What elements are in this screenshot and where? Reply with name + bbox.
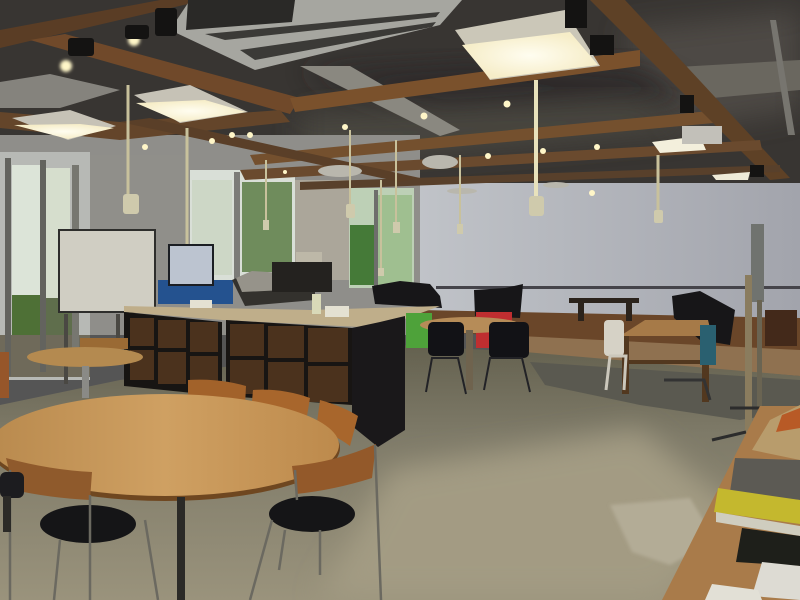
ceiling [0, 0, 800, 200]
chair at left edge [0, 352, 24, 532]
ceiling beams [0, 0, 790, 190]
printer [232, 252, 332, 306]
projector [682, 126, 722, 144]
concrete floor [0, 345, 800, 600]
left wall and side wall [0, 135, 420, 335]
middle dining table with chairs [406, 312, 530, 394]
left glass doors [0, 152, 90, 380]
central shelves with counter [124, 294, 440, 447]
pendant dome lights [318, 155, 569, 194]
light panel: right small [652, 136, 706, 153]
spotlight housings [68, 0, 764, 177]
whiteboard [59, 230, 155, 384]
partition board right [712, 224, 764, 440]
foreground chair left [6, 458, 158, 600]
ceiling lights [12, 0, 764, 196]
centre window [190, 170, 295, 280]
black chairs [428, 322, 529, 358]
hanging power cords [123, 80, 663, 276]
foreground chair right [250, 444, 381, 600]
wooden platform [420, 310, 800, 376]
light panel: far [712, 172, 750, 180]
light panel: far left [12, 110, 116, 140]
light panel: centre left [134, 85, 248, 123]
spotlights [60, 34, 600, 196]
foreground back chairs [188, 380, 358, 446]
computer and blue cabinet [158, 245, 233, 304]
small round table left [27, 338, 143, 398]
light panel: top right [455, 10, 600, 80]
back wall [420, 183, 800, 318]
right window [349, 188, 414, 288]
foreground round table [0, 394, 340, 600]
bench on platform [569, 298, 797, 346]
right wooden table with chairs [604, 320, 716, 402]
air conditioning unit [0, 0, 462, 108]
right display table with magazines [662, 405, 800, 600]
back sofas [372, 281, 735, 345]
